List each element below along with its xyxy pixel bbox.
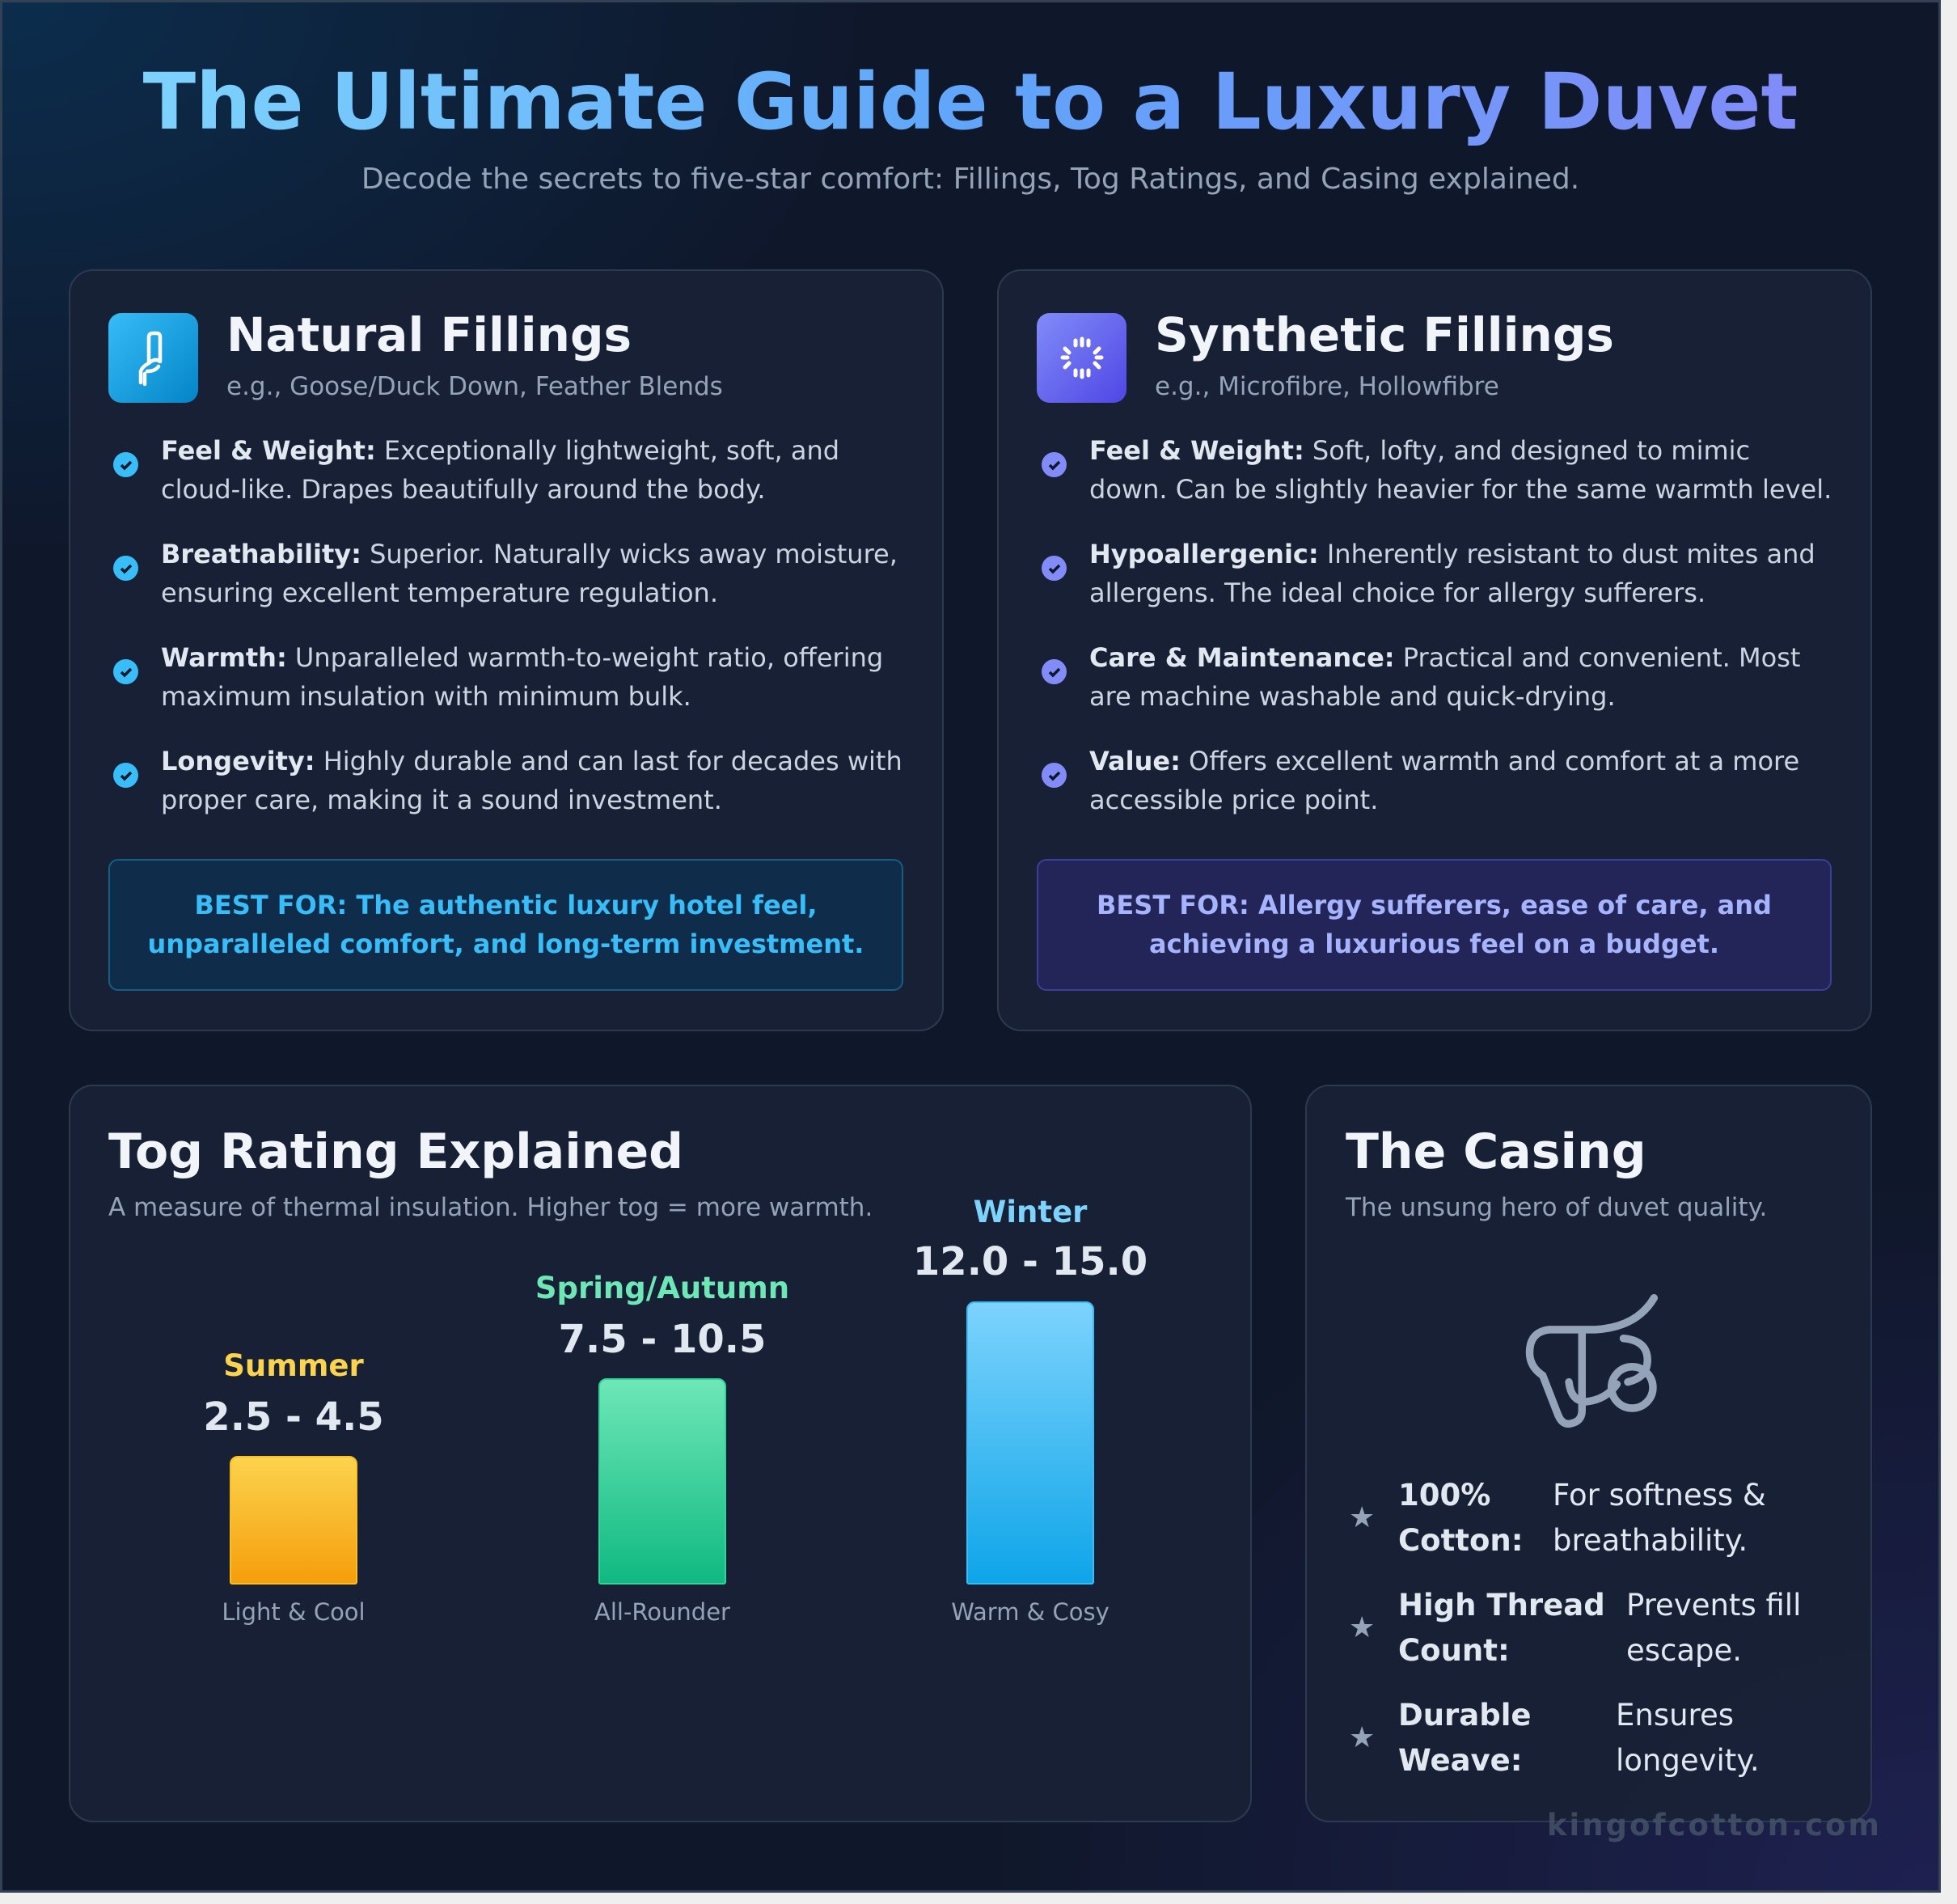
bar: summer: Light & Cool [222, 1598, 366, 1626]
item: thread count: ★ [1349, 1611, 1375, 1644]
callout: best for synthetic: BEST FOR: Allergy sufferers, ease of care, and [1097, 890, 1772, 920]
item: cotton: 100% [1398, 1478, 1490, 1513]
heading: Synthetic Fillings [1155, 307, 1614, 362]
item: warmth: Warmth: Unparalleled warmth-to-weight ratio, offering maximum insulation with minimum bulk. [161, 642, 883, 712]
item: cotton: breathability. [1553, 1523, 1748, 1558]
item: thread count: escape. [1626, 1633, 1742, 1668]
title: The Ultimate Guide to a Luxury Duvet [143, 57, 1798, 147]
bar: spring/autumn [535, 1271, 789, 1626]
item: feel: Feel & Weight: Exceptionally lightweight, soft, and cloud-like. Drapes beautifully around the body. [161, 435, 839, 505]
item: hypoallergenic: Hypoallergenic: Inherently resistant to dust mites and allergens. The ideal choice for allergy sufferers. [1089, 539, 1815, 608]
subheading: e.g., Goose/Duck Down, Feather Blends [226, 372, 723, 401]
item: weave: Ensures [1616, 1698, 1734, 1733]
list: casing features [1349, 1478, 1801, 1778]
callout: best for synthetic: achieving a luxurious feel on a budget. [1149, 929, 1719, 959]
bar: summer: Summer [223, 1348, 364, 1383]
item: thread count: Prevents fill [1626, 1588, 1801, 1623]
watermark: kingofcotton.com [1547, 1808, 1882, 1843]
item: feel: Feel & Weight: Soft, lofty, and designed to mimic down. Can be slightly heavier for the same warmth level. [1089, 435, 1832, 505]
callout: best for natural: unparalleled comfort, and long-term investment. [148, 929, 864, 959]
item: thread count: Count: [1398, 1633, 1510, 1668]
bar: spring/autumn: All-Rounder [594, 1598, 730, 1626]
item: cotton [1349, 1478, 1766, 1558]
item: thread count: High Thread [1398, 1588, 1605, 1623]
item: thread count [1349, 1588, 1801, 1668]
item: cotton: Cotton: [1398, 1523, 1524, 1558]
item: weave [1349, 1698, 1760, 1778]
heading: Tog Rating Explained [108, 1123, 683, 1180]
bar: winter: Winter [974, 1195, 1087, 1229]
heading: Natural Fillings [226, 307, 632, 362]
panel: casing [1305, 1085, 1872, 1822]
panel: natural fillings [69, 269, 944, 1031]
item: longevity: Longevity: Highly durable and can last for decades with proper care, making it a sound investment. [161, 746, 902, 815]
heading: The Casing [1346, 1123, 1646, 1180]
item: cotton: For softness & [1553, 1478, 1766, 1513]
bar: spring/autumn: 7.5 - 10.5 [559, 1317, 766, 1362]
item: value: Value: Offers excellent warmth and comfort at a more accessible price point. [1089, 746, 1799, 815]
bar chart: tog ratings [203, 1195, 1148, 1626]
item: weave: longevity. [1616, 1743, 1760, 1778]
list: synthetic features [1042, 435, 1832, 815]
subheading: e.g., Microfibre, Hollowfibre [1155, 372, 1499, 401]
callout: best for natural: BEST FOR: The authentic luxury hotel feel, [195, 890, 817, 920]
callout: best for natural [108, 859, 903, 991]
subheading: A measure of thermal insulation. Higher tog = more warmth. [108, 1193, 873, 1222]
bar: winter: 12.0 - 15.0 [913, 1239, 1148, 1284]
item: weave: Durable [1398, 1698, 1532, 1733]
item: weave: ★ [1349, 1721, 1375, 1754]
subheading: The unsung hero of duvet quality. [1346, 1193, 1767, 1222]
bar: spring/autumn: Spring/Autumn [535, 1271, 789, 1305]
callout: best for synthetic [1037, 859, 1832, 991]
panel: synthetic fillings [997, 269, 1872, 1031]
icon: spinner [1037, 313, 1126, 403]
bar: summer [203, 1348, 384, 1626]
item: care: Care & Maintenance: Practical and convenient. Most are machine washable and quick-drying. [1089, 642, 1800, 712]
list: natural features [113, 435, 902, 815]
item: cotton: ★ [1349, 1501, 1375, 1534]
item: weave: Weave: [1398, 1743, 1523, 1778]
bar: summer: 2.5 - 4.5 [203, 1394, 384, 1440]
bar: winter: Warm & Cosy [951, 1598, 1110, 1626]
subtitle: Decode the secrets to five-star comfort: Fillings, Tog Ratings, and Casing explained. [361, 163, 1579, 196]
icon: cotton/thread [1525, 1294, 1658, 1428]
bar: winter [913, 1195, 1148, 1626]
panel: tog rating [69, 1085, 1252, 1822]
item: breathability: Breathability: Superior. Naturally wicks away moisture, ensuring excellent temperature regulation. [161, 539, 898, 608]
icon: feather [108, 313, 198, 403]
